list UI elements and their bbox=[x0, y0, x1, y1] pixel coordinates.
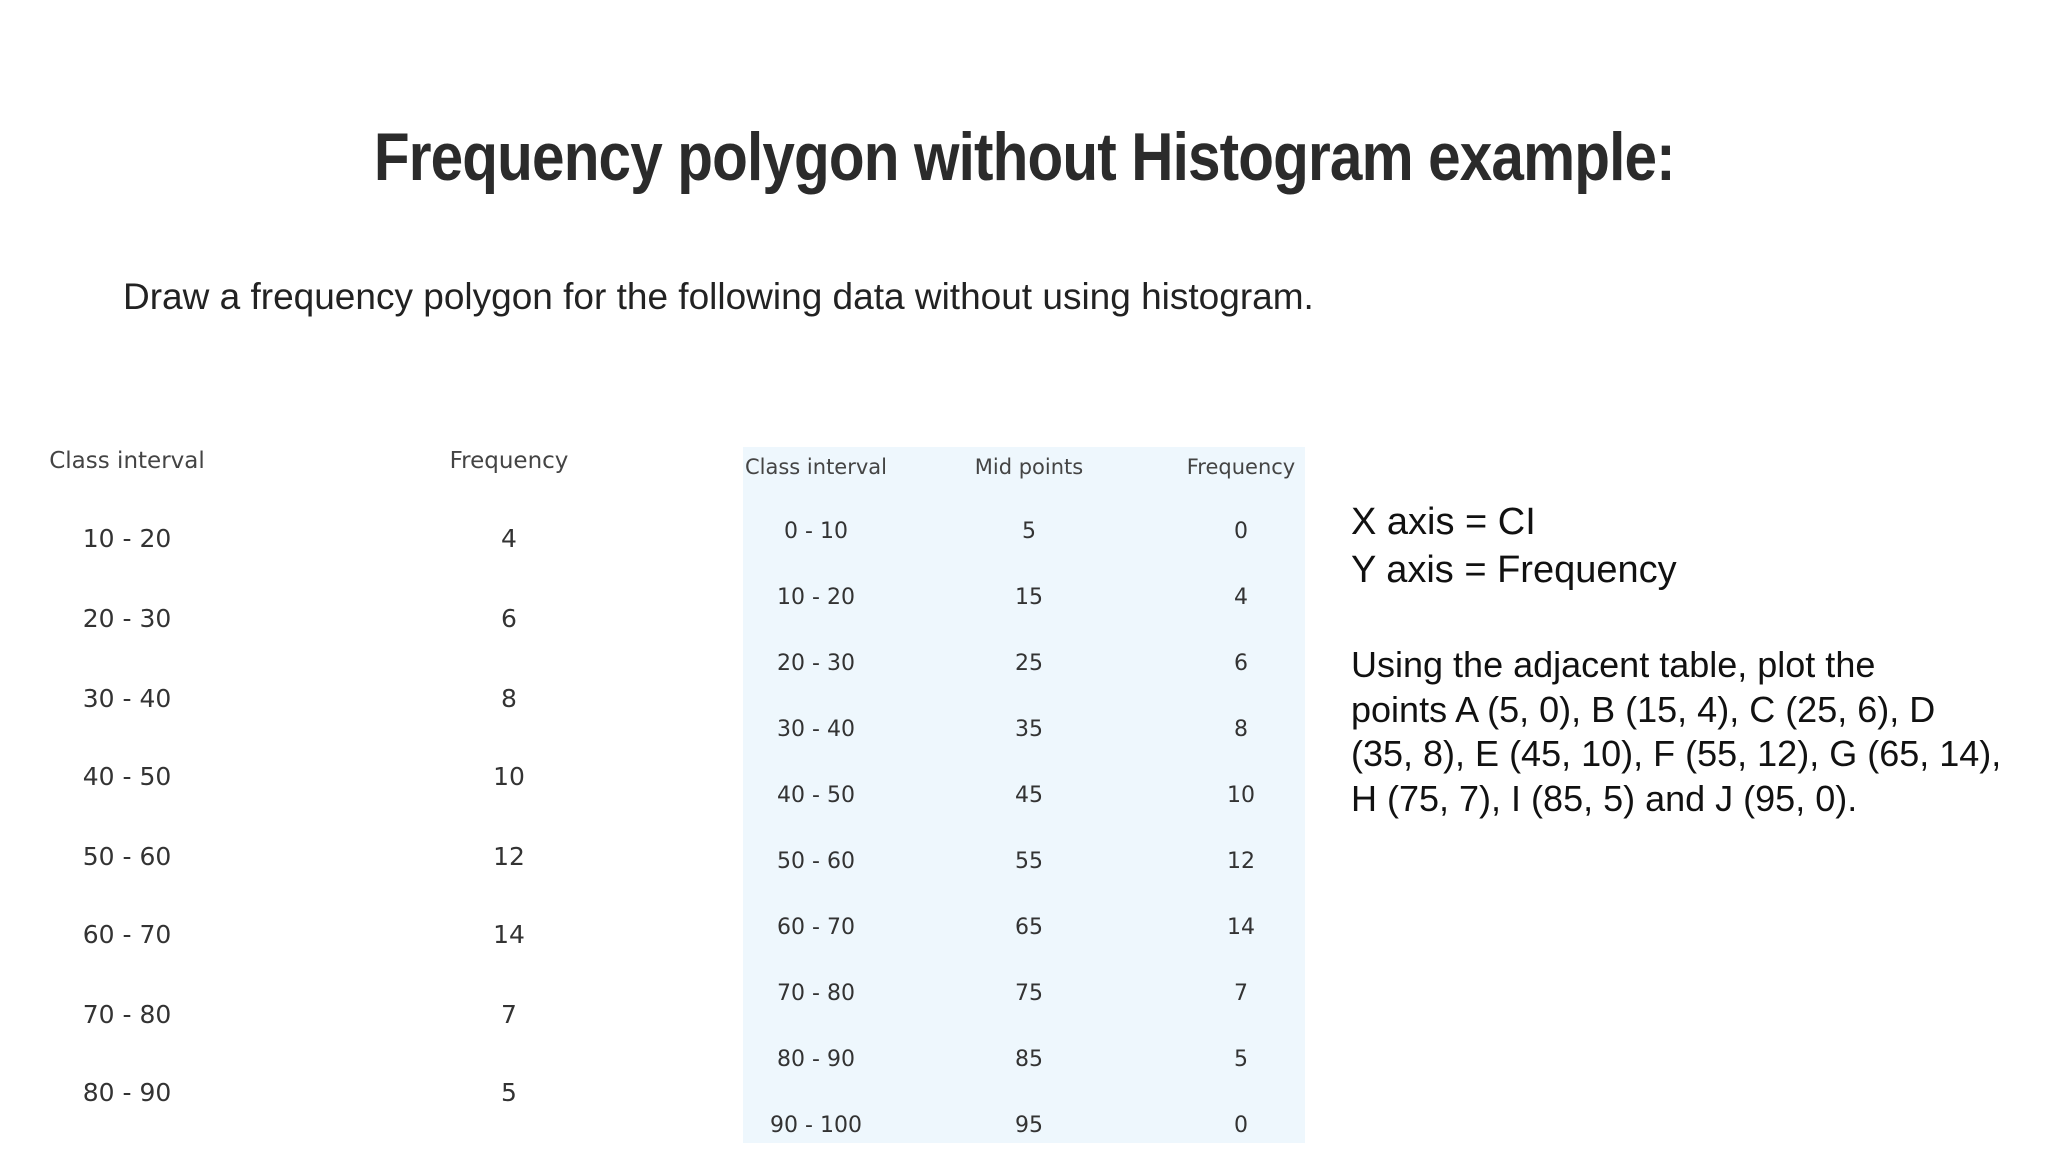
title: Frequency polygon without Histogram example: bbox=[374, 119, 1674, 195]
middle table: 0 bbox=[1234, 1113, 1248, 1138]
subtitle: Draw a frequency polygon for the following data without using histogram. bbox=[123, 276, 1314, 317]
middle table: 8 bbox=[1234, 717, 1248, 742]
left table: 10 bbox=[493, 762, 525, 791]
middle table: 65 bbox=[1015, 915, 1043, 940]
left table: Frequency bbox=[450, 448, 568, 474]
left table: 50 - 60 bbox=[83, 842, 171, 871]
middle table: 95 bbox=[1015, 1113, 1043, 1138]
middle table: 85 bbox=[1015, 1047, 1043, 1072]
middle table bbox=[743, 447, 1305, 1143]
left table: 30 - 40 bbox=[83, 684, 171, 713]
middle table: Class interval bbox=[745, 455, 887, 479]
axis text: X axis = CI bbox=[1351, 501, 1536, 543]
middle table: 75 bbox=[1015, 981, 1043, 1006]
left table: 12 bbox=[493, 842, 525, 871]
middle table: 7 bbox=[1234, 981, 1248, 1006]
left table: 80 - 90 bbox=[83, 1078, 171, 1107]
middle table: 0 bbox=[1234, 519, 1248, 544]
axis text bbox=[1351, 501, 1677, 591]
middle table: 45 bbox=[1015, 783, 1043, 808]
left table bbox=[49, 448, 568, 1107]
left table: Class interval bbox=[49, 448, 205, 474]
left table: 20 - 30 bbox=[83, 604, 171, 633]
middle table: 35 bbox=[1015, 717, 1043, 742]
instructions text: points A (5, 0), B (15, 4), C (25, 6), D bbox=[1351, 688, 1935, 730]
left table: 70 - 80 bbox=[83, 1000, 171, 1029]
left table: 5 bbox=[501, 1078, 517, 1107]
middle table: 60 - 70 bbox=[777, 915, 855, 940]
left table: 7 bbox=[501, 1000, 517, 1029]
middle table: 10 bbox=[1227, 783, 1255, 808]
middle table: 15 bbox=[1015, 585, 1043, 610]
middle table: Mid points bbox=[975, 455, 1083, 479]
middle table: Frequency bbox=[1187, 455, 1295, 479]
middle table: 30 - 40 bbox=[777, 717, 855, 742]
left table: 6 bbox=[501, 604, 517, 633]
middle table: 80 - 90 bbox=[777, 1047, 855, 1072]
middle table: 4 bbox=[1234, 585, 1248, 610]
middle table: 12 bbox=[1227, 849, 1255, 874]
instructions text: H (75, 7), I (85, 5) and J (95, 0). bbox=[1351, 778, 1857, 818]
instructions text bbox=[1351, 644, 2001, 818]
axis text: Y axis = Frequency bbox=[1351, 549, 1677, 591]
middle table: 5 bbox=[1022, 519, 1036, 544]
middle table: 70 - 80 bbox=[777, 981, 855, 1006]
left table: 40 - 50 bbox=[83, 762, 171, 791]
middle table: 14 bbox=[1227, 915, 1255, 940]
middle table: 0 - 10 bbox=[784, 519, 848, 544]
middle table: 10 - 20 bbox=[777, 585, 855, 610]
middle table: 40 - 50 bbox=[777, 783, 855, 808]
middle table: 20 - 30 bbox=[777, 651, 855, 676]
left table: 4 bbox=[501, 524, 517, 553]
middle table: 25 bbox=[1015, 651, 1043, 676]
middle table: 6 bbox=[1234, 651, 1248, 676]
left table: 60 - 70 bbox=[83, 920, 171, 949]
middle table: 50 - 60 bbox=[777, 849, 855, 874]
left table: 8 bbox=[501, 684, 517, 713]
left table: 14 bbox=[493, 920, 525, 949]
middle table: 55 bbox=[1015, 849, 1043, 874]
middle table: 90 - 100 bbox=[770, 1113, 862, 1138]
instructions text: Using the adjacent table, plot the bbox=[1351, 644, 1875, 685]
middle table: 5 bbox=[1234, 1047, 1248, 1072]
instructions text: (35, 8), E (45, 10), F (55, 12), G (65, 14), bbox=[1351, 733, 2001, 774]
left table: 10 - 20 bbox=[83, 524, 171, 553]
